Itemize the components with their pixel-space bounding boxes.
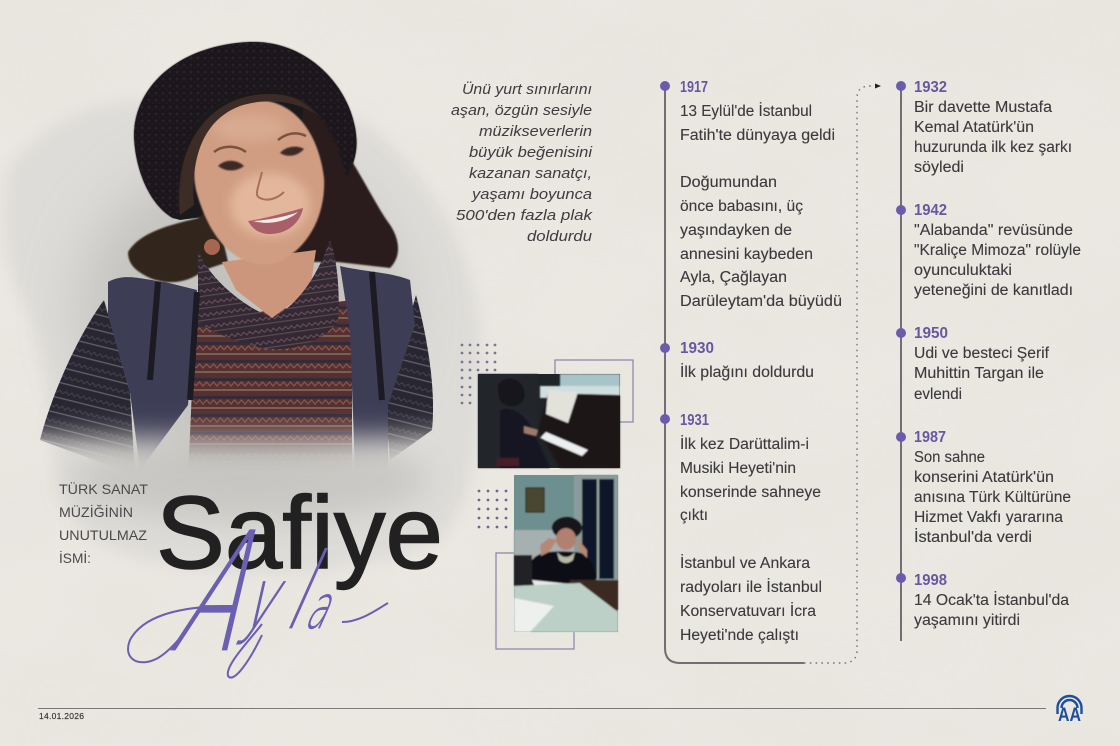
entry 1917: annesini kaybeden <box>680 246 813 263</box>
logo: AA <box>1058 696 1082 726</box>
timeline line right <box>900 86 902 641</box>
arrow head <box>875 84 881 88</box>
entry 1950: Udi ve besteci Şerif <box>914 345 1050 362</box>
name: Safiye: Safiye <box>156 475 443 590</box>
entry 1931 <box>660 412 822 644</box>
hair left <box>128 205 228 282</box>
small heading <box>59 480 148 566</box>
intro text <box>451 80 594 245</box>
photo frame top <box>555 360 633 422</box>
entry 1932: Bir davette Mustafa <box>914 99 1052 116</box>
entry 1987: Son sahne <box>914 449 985 466</box>
intro text: doldurdu <box>527 228 593 245</box>
entry 1987 <box>896 429 1071 546</box>
script name: Ayla <box>128 496 388 689</box>
intro text: Ünü yurt sınırlarını <box>462 80 592 98</box>
vest left <box>108 277 197 470</box>
entry 1931: İstanbul ve Ankara <box>680 554 810 572</box>
entry 1942: 1942 <box>914 202 947 219</box>
mouth <box>248 208 303 234</box>
photo: at the piano <box>478 374 620 468</box>
entry 1998 <box>896 572 1069 629</box>
intro text: kazanan sanatçı, <box>469 165 592 182</box>
small heading: İSMİ: <box>59 549 91 566</box>
eyes <box>218 147 304 170</box>
left sleeve <box>40 300 135 475</box>
intro text: büyük beğenisini <box>469 144 593 161</box>
entry 1917: Darüleytam'da büyüdü <box>680 293 842 310</box>
entry 1950: Muhittin Targan ile <box>914 365 1044 382</box>
entry 1917 <box>660 79 842 310</box>
script name: Ayla: A <box>151 496 298 689</box>
entry 1998: 14 Ocak'ta İstanbul'da <box>914 591 1069 609</box>
logo: AA: AA <box>1058 705 1081 726</box>
entry 1917: 13 Eylül'de İstanbul <box>680 102 812 120</box>
entry 1950 <box>896 325 1050 403</box>
entry 1931: Musiki Heyeti'nin <box>680 460 796 477</box>
entry 1942 <box>896 202 1081 299</box>
entry 1987: İstanbul'da verdi <box>914 528 1032 546</box>
small heading: MÜZİĞİNİN <box>59 503 133 520</box>
face <box>194 100 324 264</box>
entry 1932: huzurunda ilk kez şarkı <box>914 139 1072 156</box>
entry 1931: konserinde sahneye <box>680 484 821 501</box>
small heading: UNUTULMAZ <box>59 527 147 543</box>
entry 1931: İlk kez Darüttalim-i <box>680 435 809 453</box>
intro text: yaşamı boyunca <box>471 186 592 203</box>
entry 1987: 1987 <box>914 429 946 446</box>
entry 1987: anısına Türk Kültürüne <box>914 489 1071 506</box>
dot grid 2 <box>478 490 507 528</box>
entry 1931: 1931 <box>680 412 709 429</box>
earring <box>204 239 220 255</box>
timeline line left <box>665 86 804 663</box>
footer rule <box>38 708 1046 710</box>
script name: Ayla: y <box>231 551 302 649</box>
entry 1942: oyunculuktaki <box>914 262 1012 279</box>
small heading: TÜRK SANAT <box>59 480 148 497</box>
scarf <box>198 240 339 349</box>
entry 1987: konserini Atatürk'ün <box>914 469 1054 486</box>
entry 1942: yeteneğini de kanıtladı <box>914 282 1073 299</box>
intro text: aşan, özgün sesiyle <box>451 102 592 119</box>
entry 1917: Doğumundan <box>680 174 777 191</box>
watercolor wash behind portrait <box>4 102 480 573</box>
entry 1950: 1950 <box>914 325 948 342</box>
entry 1998: yaşamını yitirdi <box>914 612 1020 629</box>
intro text: müzikseverlerin <box>479 123 592 140</box>
hat brim <box>179 94 330 215</box>
dot grid 1 <box>461 344 496 404</box>
flourish <box>128 575 388 678</box>
timeline column 2 <box>896 79 1081 629</box>
entry 1931: radyoları ile İstanbul <box>680 578 822 596</box>
entry 1931: Konservatuvarı İcra <box>680 602 816 620</box>
entry 1950: evlendi <box>914 386 962 403</box>
hat backing <box>134 42 357 220</box>
entry 1930: İlk plağını doldurdu <box>680 363 814 381</box>
hat <box>134 42 357 218</box>
hair right <box>290 100 398 268</box>
timeline column 1 <box>660 79 842 644</box>
entry 1932 <box>896 79 1072 176</box>
right sleeve <box>385 295 433 460</box>
photo: at the table <box>514 475 618 632</box>
sweater <box>189 300 352 460</box>
entry 1917: önce babasını, üç <box>680 198 803 215</box>
timeline connector dotted <box>804 86 877 663</box>
date: 14.01.2026 <box>39 711 84 721</box>
entry 1917: 1917 <box>680 79 708 96</box>
entry 1930 <box>660 340 814 381</box>
entry 1998: 1998 <box>914 572 947 589</box>
entry 1942: "Alabanda" revüsünde <box>914 222 1073 239</box>
script name: Ayla: la <box>272 532 348 653</box>
entry 1942: "Kraliçe Mimoza" rolüyle <box>914 242 1081 259</box>
entry 1931: Heyeti'nde çalıştı <box>680 627 799 644</box>
entry 1917: yaşındayken de <box>680 222 792 239</box>
entry 1987: Hizmet Vakfı yararına <box>914 509 1063 526</box>
entry 1930: 1930 <box>680 340 714 357</box>
entry 1931: çıktı <box>680 507 708 524</box>
neck <box>222 250 316 318</box>
portrait of Safiye Ayla <box>40 42 433 480</box>
entry 1932: 1932 <box>914 79 947 96</box>
entry 1932: Kemal Atatürk'ün <box>914 119 1034 136</box>
entry 1917: Fatih'te dünyaya geldi <box>680 127 835 144</box>
vest right <box>340 266 415 470</box>
intro text: 500'den fazla plak <box>456 207 594 224</box>
photo frame bottom <box>496 553 574 649</box>
nose <box>257 172 284 200</box>
entry 1932: söyledi <box>914 159 964 176</box>
entry 1917: Ayla, Çağlayan <box>680 269 787 286</box>
